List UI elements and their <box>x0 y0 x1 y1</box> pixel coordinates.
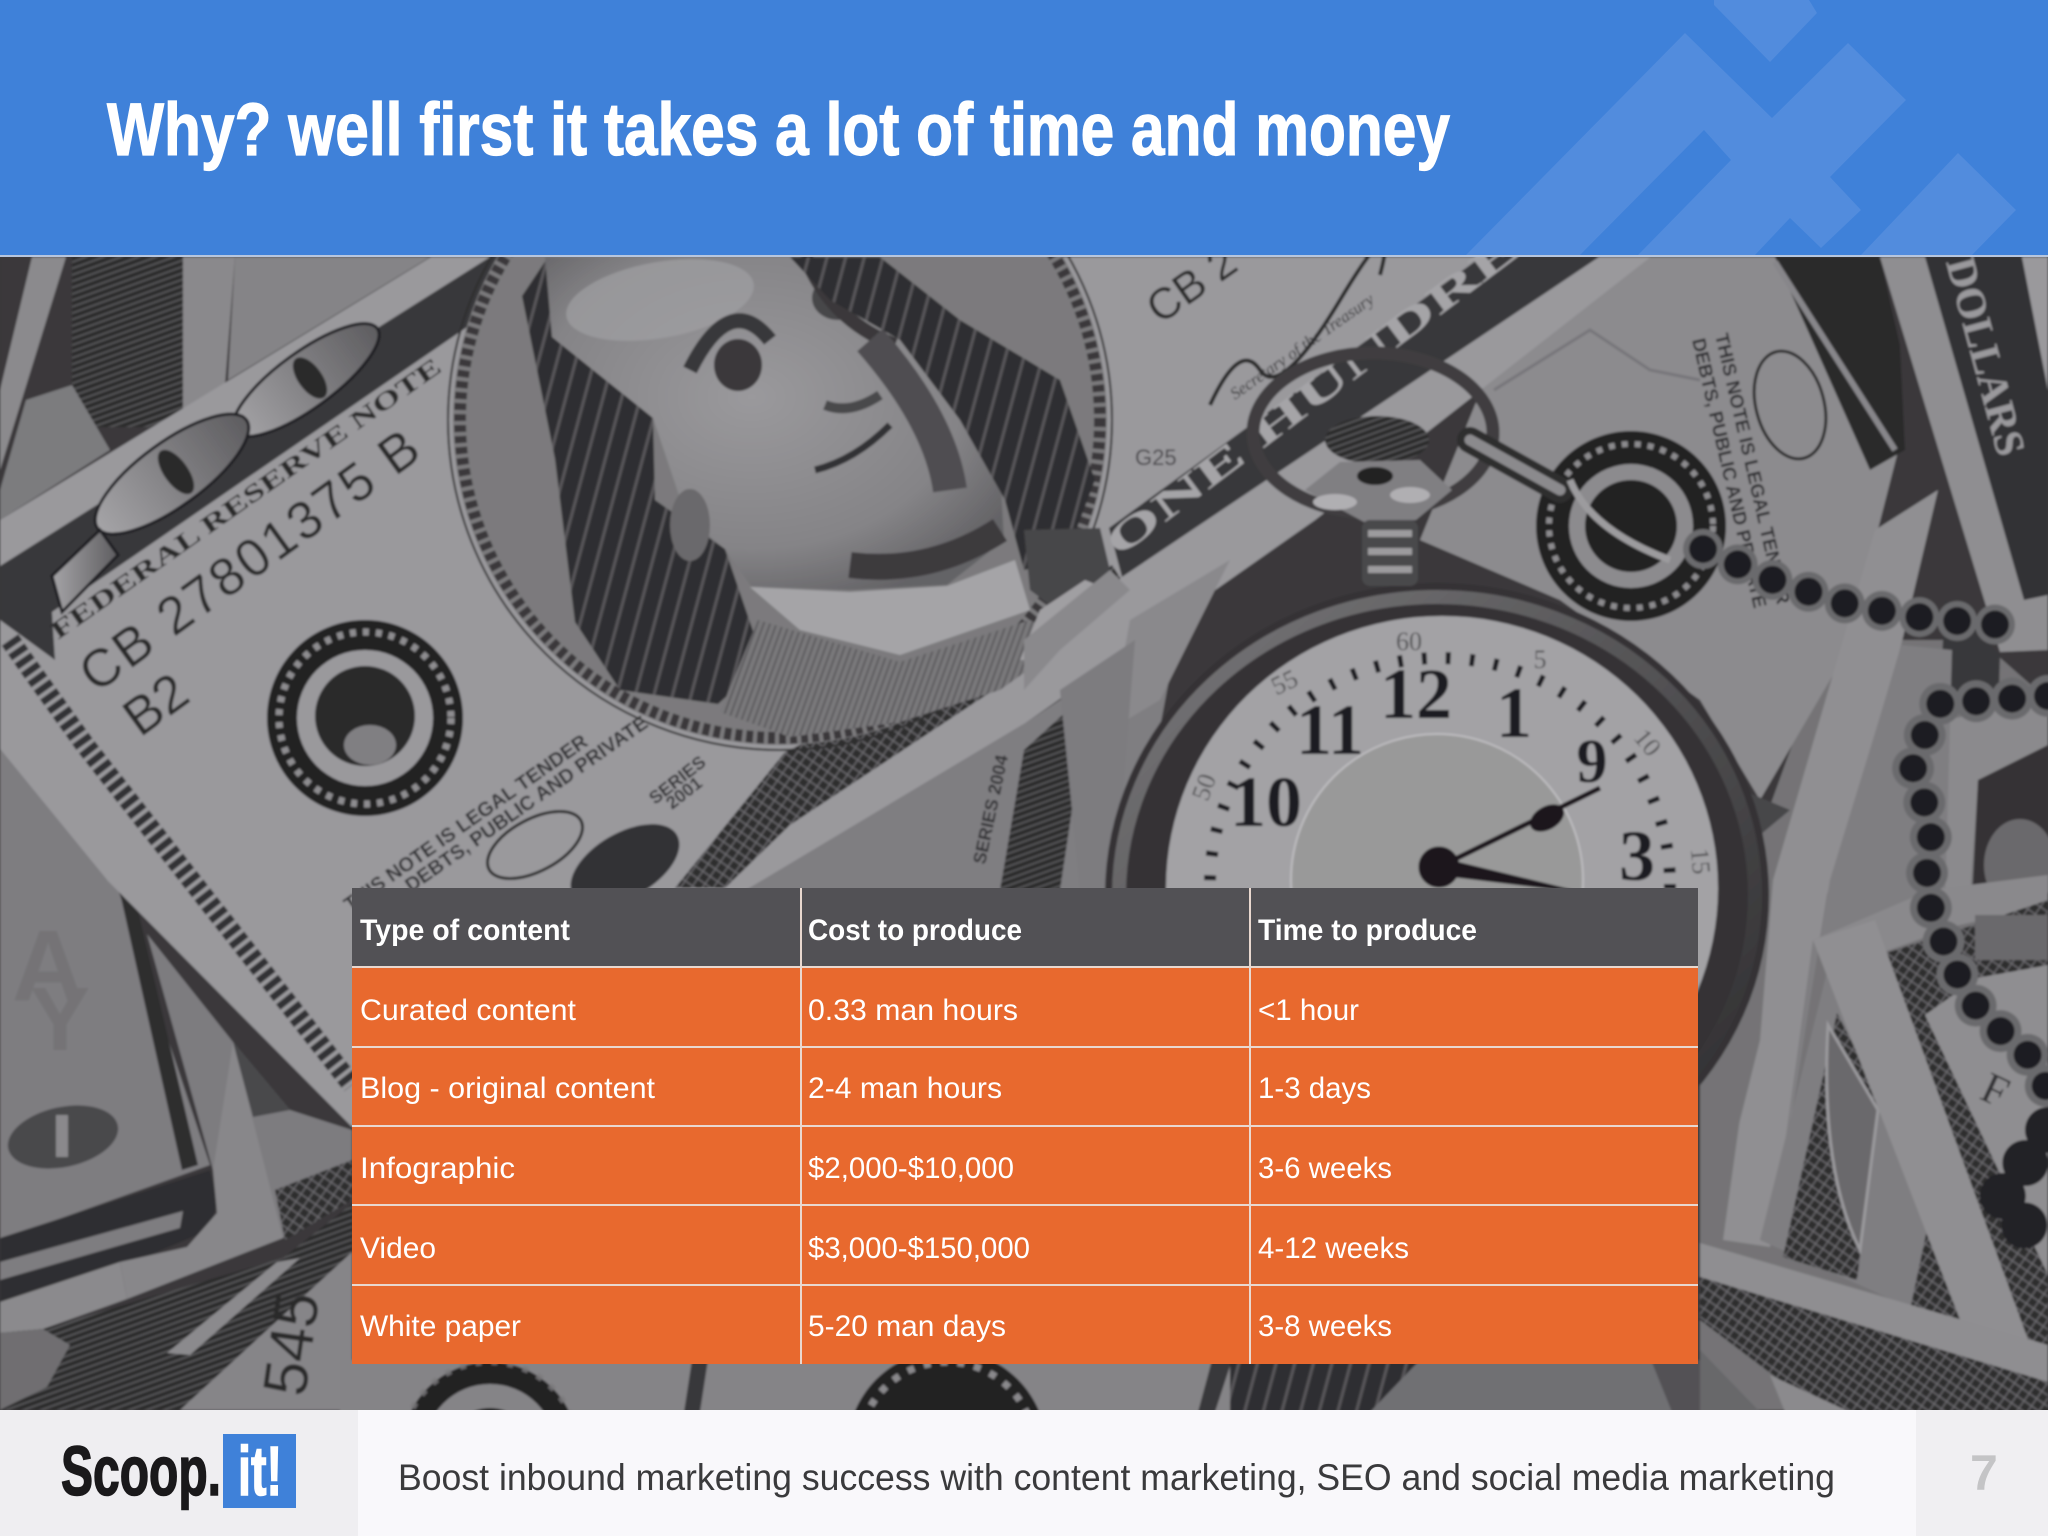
watch numerals: 60 <box>1396 627 1422 656</box>
ornament band with 100 <box>0 257 500 660</box>
upper-right bill with seal: THIS NOTE IS LEGAL TENDER <box>1710 331 1793 607</box>
row: video <box>360 1232 1409 1265</box>
main hundred dollar bill: ALL DEBTS, PUBLIC AND PRIVATE <box>365 712 652 922</box>
title: Why? well first it takes a lot of time and money <box>107 88 1450 171</box>
row: blog <box>360 1072 1371 1105</box>
row: blog: Blog - original content <box>360 1072 656 1105</box>
row: blog: 1-3 days <box>1258 1072 1371 1105</box>
lower-left bill <box>0 749 352 1410</box>
Franklin hair right <box>790 257 1095 570</box>
row: white paper: White paper <box>360 1310 521 1343</box>
logo: Scoop.it!: it! <box>238 1432 282 1510</box>
row: white paper: 3-8 weeks <box>1258 1310 1392 1343</box>
upper-right bill with seal: DEBTS, PUBLIC AND PRIVATE <box>1687 336 1770 610</box>
main hundred dollar bill: SERIES <box>645 752 709 808</box>
watch numerals <box>1186 627 1716 896</box>
watch numerals: 1 <box>1496 673 1532 753</box>
row: video: 4-12 weeks <box>1258 1232 1409 1265</box>
watch dial <box>1166 616 1718 1160</box>
watch numerals: 5 <box>1534 645 1546 674</box>
watch numerals: 10 <box>1230 762 1302 842</box>
lower-left bill: A <box>12 910 84 1022</box>
table <box>352 888 1698 1364</box>
table header row: Type of content <box>360 914 570 947</box>
ONE HUNDRED band <box>1109 257 1599 577</box>
right-side base tones <box>1700 640 2048 1410</box>
row: white paper: 5-20 man days <box>808 1310 1006 1343</box>
lower-left bill: 545 <box>251 1288 333 1400</box>
main hundred dollar bill <box>0 90 1651 1127</box>
watch numerals: 11 <box>1296 690 1364 770</box>
lower-middle bills below table <box>340 1350 1702 1536</box>
upper-right bill with seal <box>1420 257 1905 835</box>
row: video: Video <box>360 1232 436 1265</box>
watch hands <box>1419 788 1600 892</box>
top-right dollar strip: DOLLARS <box>1936 253 2033 461</box>
pocket watch <box>1105 353 2048 1250</box>
watch numerals: 9 <box>1576 728 1608 796</box>
header rule <box>0 255 2048 257</box>
main hundred dollar bill: THIS NOTE IS LEGAL TENDER <box>340 730 592 916</box>
portrait oval <box>453 95 1107 745</box>
top-left bills behind <box>0 257 430 520</box>
watch numerals: 55 <box>1266 664 1302 701</box>
footer tagline: Boost inbound marketing success with content marketing, SEO and social media marketing <box>398 1457 1835 1498</box>
row: white paper <box>360 1310 1392 1343</box>
upper right bill text: CB 2 <box>1138 237 1246 333</box>
row: blog: 2-4 man hours <box>808 1072 1002 1105</box>
main hundred dollar bill: CB 27801375 B <box>68 418 431 704</box>
watch numerals: 10 <box>1628 723 1667 762</box>
lower-left bill: Y <box>30 970 90 1070</box>
lower margin <box>1024 257 1651 724</box>
lower-right bills <box>1700 490 2048 1412</box>
table body rows <box>352 888 1698 1364</box>
lower-right bills: F <box>1974 1063 2017 1117</box>
top-right dollar strip <box>1880 253 2048 652</box>
row: curated content: <1 hour <box>1258 994 1359 1027</box>
row: infographic <box>360 1152 1392 1185</box>
main hundred dollar bill: B2 <box>112 662 200 748</box>
main hundred dollar bill: ONE HUNDRED <box>1096 192 1571 565</box>
watch numerals: 12 <box>1380 654 1452 734</box>
row: video: $3,000-$150,000 <box>808 1232 1030 1265</box>
watch crown <box>1253 353 1493 513</box>
main hundred dollar bill: 2001 <box>662 773 706 813</box>
row: infographic: $2,000-$10,000 <box>808 1152 1014 1185</box>
table header row: Time to produce <box>1258 914 1477 947</box>
seal <box>267 620 463 816</box>
watch numerals: 3 <box>1619 816 1655 896</box>
header band <box>0 0 2048 255</box>
table header row: Cost to produce <box>808 914 1022 947</box>
left ornament edge <box>10 640 352 1085</box>
Franklin collar and coat <box>720 620 1070 737</box>
row: curated content: 0.33 man hours <box>808 994 1018 1027</box>
main hundred dollar bill: G25 <box>1135 445 1177 470</box>
Franklin face <box>545 257 1004 590</box>
watch numerals: 15 <box>1685 847 1716 875</box>
row: infographic: Infographic <box>360 1152 515 1185</box>
page number: 7 <box>1970 1445 1998 1501</box>
second bill under main bill: SERIES 2004 <box>969 753 1012 866</box>
bill text: FEDERAL RESERVE NOTE <box>46 353 446 645</box>
row: curated content: Curated content <box>360 994 577 1027</box>
watch chain <box>1470 440 1560 490</box>
main hundred dollar bill: Secretary of the Treasury <box>1226 289 1378 403</box>
lower right ornament band <box>675 565 1128 888</box>
Franklin eyes and mouth <box>714 339 762 391</box>
footer <box>0 1410 2048 1536</box>
Franklin hair left <box>522 257 764 704</box>
row: infographic: 3-6 weeks <box>1258 1152 1392 1185</box>
second bill under main bill <box>738 560 1230 895</box>
watch case <box>1105 583 1769 1207</box>
watch numerals: 50 <box>1186 770 1222 804</box>
row: curated content <box>360 994 1359 1027</box>
header watermark shapes <box>1466 0 2016 255</box>
logo: Scoop.it!: Scoop. <box>61 1432 221 1510</box>
table header row <box>352 888 1698 967</box>
